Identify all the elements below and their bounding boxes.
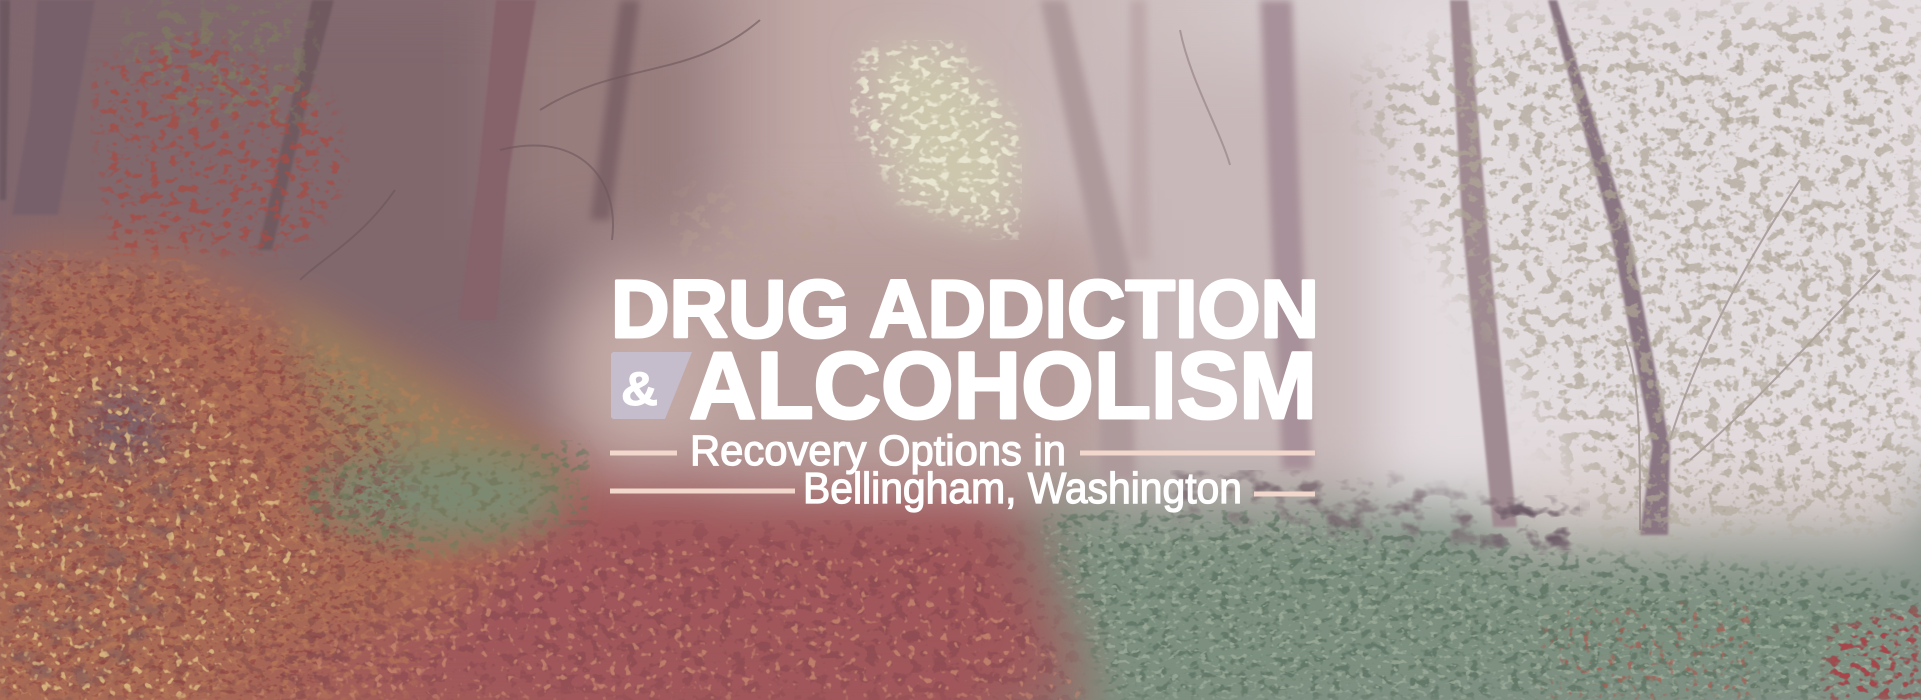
olive undergrowth on the upper hillside [280, 300, 560, 520]
ampersand badge [611, 352, 692, 419]
scattered red leaves on green cover [1530, 600, 1760, 700]
hillside leaves: green grass [300, 440, 590, 560]
hillside leaves: dark clumps [0, 260, 420, 700]
hillside leaves: shadow [0, 420, 210, 700]
subtitle: Bellingham, Washington: Bellingham, Washington [803, 464, 1242, 513]
subtitle accent rules [610, 450, 1315, 496]
path leaves: dark [260, 520, 1090, 700]
foliage: right tree fine leaves [1500, 40, 1921, 520]
dark shadow on the hillside [83, 387, 167, 463]
hillside leaves: orange [0, 250, 590, 700]
path leaves: pale flecks [230, 540, 1090, 700]
pale lit tree glow [870, 50, 1015, 230]
hillside leaves: dark red [0, 250, 420, 700]
thin branches [300, 20, 1880, 530]
foliage: right tree leaves [1350, 0, 1921, 540]
title block [610, 264, 1319, 513]
subtitle: Recovery Options in: Recovery Options in [690, 427, 1066, 475]
green patch on the hillside [315, 453, 565, 537]
dark shrubs along the ground edge [1170, 470, 1590, 550]
near tree trunks [0, 0, 1670, 535]
red leaves bottom right [1820, 605, 1921, 700]
green ground cover: dark leaves [1040, 510, 1921, 700]
far tree trunks in fog [590, 0, 1312, 480]
foliage: pale lit tree [850, 40, 1022, 240]
foliage: red leaves upper left [90, 30, 350, 260]
hillside leaves: yellow highlights [0, 330, 330, 700]
foliage: pale tree haze [670, 180, 850, 280]
green ground cover: light leaves [1040, 520, 1921, 700]
heading: Alcoholism: ALCOHOLISM [689, 333, 1317, 439]
ampersand badge: & [621, 362, 658, 415]
foliage: olive leaves upper left [120, 0, 320, 130]
dark shrubs at tree bases [1480, 495, 1580, 555]
heading: Drug Addiction: DRUG ADDICTION [611, 264, 1319, 355]
